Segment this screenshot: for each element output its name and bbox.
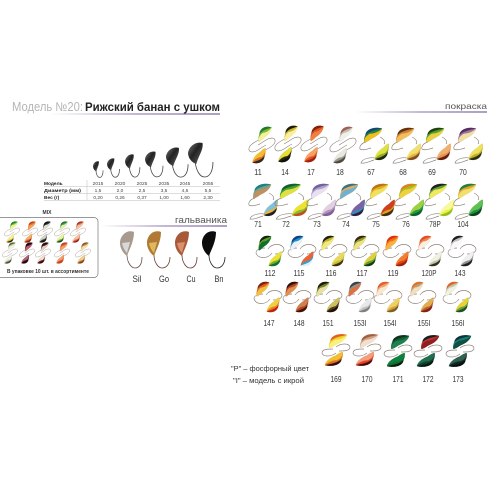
panel: MIX assortment [0,210,98,278]
lure 73 [307,184,336,229]
lure 170: 170 [362,375,373,384]
lure 119 [383,236,411,278]
galvanic lure: Sil [120,231,142,284]
colour row 5 [322,334,474,384]
specification table: 2,0 [117,188,124,194]
specification table: 4,5 [182,188,189,194]
specification table: 2035 [159,181,170,187]
galvanic lure: Cu: Cu [186,274,196,284]
lure 171 [384,335,412,384]
lure 169: 169 [330,375,342,384]
specification table: 2,5 [139,188,146,194]
hook 2045 [166,148,188,177]
lure 74: 74 [342,220,350,229]
specification table: 1,00 [159,195,169,201]
lure 75: 75 [372,220,380,229]
lure 72 [275,184,308,229]
lure 172 [414,335,442,384]
galvanic lure: Go [147,231,170,284]
lure 73: 73 [313,220,321,229]
lure 75 [366,184,395,229]
lure 70: 70 [459,168,467,177]
lure 17: 17 [307,168,315,177]
lure 155I: 155I [418,319,430,328]
specification table: Вес (г) [44,195,60,201]
specification table: 2055 [203,181,214,187]
lure 153I [346,282,374,328]
lure 119: 119 [388,269,399,278]
specification table: 0,37 [137,195,147,201]
specification table: 2,30 [203,195,213,201]
panel: MIX assortment: В упаковке 10 шт. в ассортименте [7,269,90,275]
specification table: 0,26 [115,195,125,201]
lure 155I [408,282,436,328]
hook 2020 [107,158,119,177]
lure 151 [314,282,342,328]
lure 156I [443,282,471,328]
hook 2035 [145,151,163,177]
legend notes: "I" – модель с икрой [233,377,304,385]
specification table: Модель [44,181,63,187]
lure 112 [256,236,284,278]
product size lineup: black hooks [93,143,213,177]
lure 104 [454,184,483,229]
hook 2055 [188,143,213,177]
lure 171: 171 [392,375,404,384]
lure 172: 172 [422,375,434,384]
galvanic lure: Sil: Sil [132,274,142,284]
lure 74 [336,184,365,229]
galvanic lure: Bn: Bn [214,274,224,284]
lure 156I: 156I [452,319,464,328]
lure 11 [249,127,275,177]
lure 69: 69 [428,168,436,177]
lure 115: 115 [294,269,305,278]
heading: galvanic finishes: гальваника [175,215,227,225]
lure 71 [249,184,278,229]
title: Модель №20: [12,100,83,114]
lure 68: 68 [399,168,407,177]
lure 76: 76 [402,220,410,229]
specification table: 3,5 [161,188,168,194]
specification table: 2020 [115,181,126,187]
lure 120P [416,236,444,278]
lure 71: 71 [254,220,262,229]
legend notes [231,365,310,385]
specification table: 1,5 [95,188,102,194]
lure 11: 11 [254,168,262,177]
lure 17 [301,126,327,177]
heading: paint finishes [355,101,487,112]
hook 2015 [93,161,103,177]
lure 154I [374,282,402,328]
lure 78P [425,184,454,229]
lure 72: 72 [282,220,290,229]
lure 169 [322,334,350,384]
colour row 4 [254,282,471,328]
lure 117: 117 [356,269,368,278]
heading: paint finishes: покраска [445,101,487,111]
panel: MIX assortment: MIX [43,210,52,216]
lure 115 [288,236,316,278]
lure 154I: 154I [384,319,396,328]
lure 112: 112 [264,269,276,278]
lure 117 [351,236,379,278]
galvanic lure: Cu [175,231,197,284]
specification table: 0,20 [93,195,103,201]
title: Рижский банан с ушком [85,100,220,114]
galvanic lure: Go: Go [159,274,169,284]
lure 70 [454,128,483,177]
lure 151: 151 [322,319,334,328]
lure 14 [275,126,301,177]
lure 147: 147 [264,319,275,328]
hook 2025 [125,154,140,177]
lure 18 [330,127,356,177]
lure 147 [254,282,282,328]
lure 173 [446,335,474,384]
legend notes: "P" – фосфорный цвет [231,365,310,373]
lure 153I: 153I [354,319,366,328]
galvanic lure: Bn [202,231,225,284]
lure 14: 14 [281,168,289,177]
title [12,100,220,114]
specification table: 1,60 [180,195,190,201]
lure 173: 173 [452,375,464,384]
specification table: Диаметр (мм) [44,188,81,194]
lure 69 [422,128,451,177]
lure 143: 143 [454,269,466,278]
specification table: 5,5 [205,188,212,194]
lure 148: 148 [294,319,305,328]
lure 120P: 120P [422,269,436,278]
lure 18: 18 [336,168,344,177]
specification table: 2025 [137,181,148,187]
lure 78P: 78P [429,220,441,229]
colour row 2 [249,184,483,229]
specification table: 2015 [93,181,104,187]
lure 67 [360,128,389,177]
colour row 1 [249,126,483,177]
lure 67: 67 [367,168,375,177]
lure 68 [392,128,421,177]
lure 143 [448,236,476,278]
lure 76 [395,184,424,229]
lure 170 [353,334,381,384]
lure 116: 116 [326,269,337,278]
specification table [44,180,220,201]
specification table: 2045 [180,181,191,187]
lure 104: 104 [458,220,469,229]
lure 148 [283,282,311,328]
lure 116 [319,236,347,278]
heading: galvanic finishes [100,215,227,226]
colour row 3 [256,236,476,278]
